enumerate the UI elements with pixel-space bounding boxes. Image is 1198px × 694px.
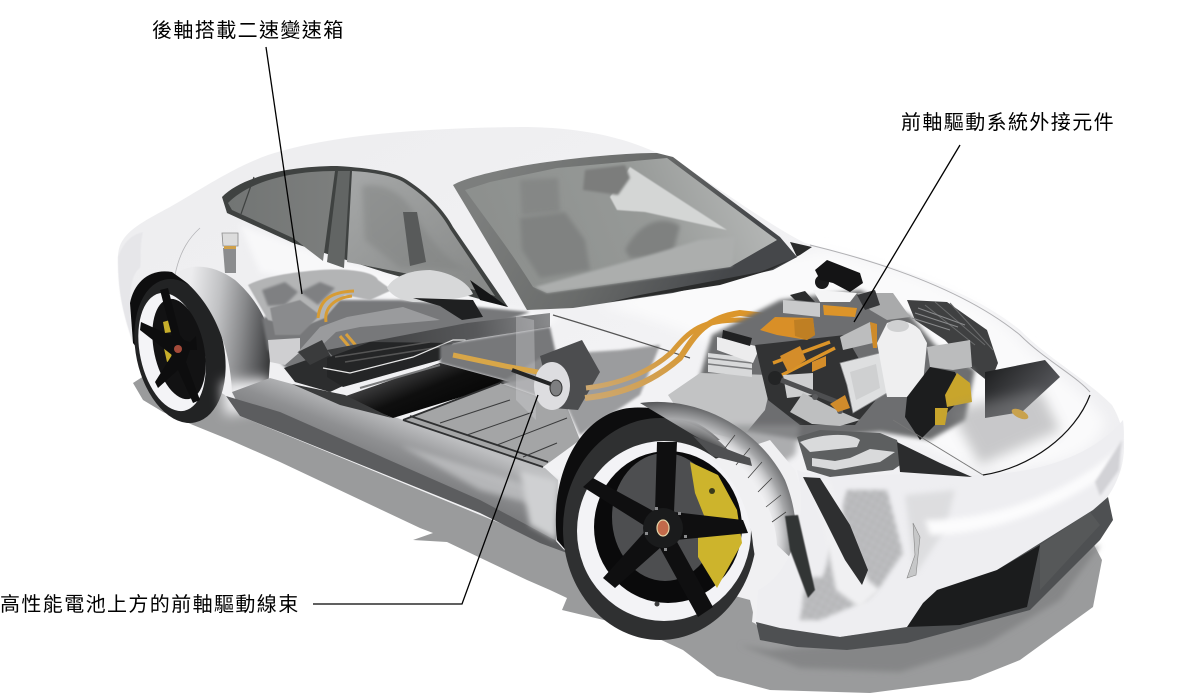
headlight (797, 430, 903, 477)
dark mechanical core (755, 335, 880, 425)
rear quarter glass (228, 171, 335, 261)
side windows (222, 166, 508, 307)
crease line (893, 420, 983, 475)
steering wheel (625, 221, 680, 258)
rear fender panel edge (118, 232, 143, 343)
right silver module (927, 340, 972, 370)
fender bracket (785, 515, 815, 598)
ghost tire band (640, 402, 796, 560)
ghost bracket (907, 523, 920, 578)
mirror housing (387, 270, 473, 302)
pillar ghost (516, 316, 536, 420)
seat belt tower (403, 212, 426, 266)
bumper shell (756, 420, 1124, 637)
rear rim inner (144, 294, 214, 404)
transparent rear tire (176, 267, 271, 403)
rear cables (318, 291, 354, 322)
lower rear cables (340, 334, 358, 350)
motor fin rings (708, 353, 752, 377)
rear tire (122, 270, 238, 432)
bolts (812, 394, 818, 400)
car body (118, 127, 1124, 640)
fender (712, 440, 815, 640)
hood highlight (600, 250, 1105, 470)
right fine pipes (912, 308, 965, 330)
front wheel (556, 407, 757, 640)
module top ribs (335, 342, 440, 362)
door white panel (240, 225, 560, 330)
disc hub (550, 380, 562, 396)
dark box top (790, 291, 815, 302)
ghost fade at bottom (222, 378, 270, 415)
caliper dark screw (709, 488, 715, 494)
black control unit (815, 260, 863, 292)
front rim (577, 441, 751, 621)
tank cap (887, 320, 909, 332)
rear door glass (327, 171, 350, 268)
coolant tank (877, 321, 927, 397)
grille side carbon (1040, 512, 1100, 590)
ghost fade to hood (950, 390, 1060, 465)
battery wiring (323, 340, 520, 373)
rear bracket dark (298, 340, 330, 365)
reservoir (813, 290, 857, 302)
callout: 高性能電池上方的前軸驅動線束 (0, 395, 538, 616)
gearbox shadow (262, 282, 335, 306)
motor base silver (668, 373, 773, 440)
upper silver box (783, 300, 820, 317)
pack dashes (440, 400, 567, 457)
silver module (840, 322, 873, 350)
upper orange bracket (823, 305, 857, 317)
orange cables centre (773, 342, 835, 375)
bumper sheen bands (925, 445, 1122, 535)
motor top block (717, 337, 760, 363)
rear hub (174, 345, 182, 353)
main orange block (760, 317, 815, 340)
windshield glass (465, 158, 777, 293)
label: 高性能電池上方的前軸驅動線束 (0, 593, 300, 616)
driveshaft (512, 370, 556, 386)
side motor and harness (453, 313, 775, 410)
windshield (453, 153, 812, 310)
rear spokes (140, 288, 200, 403)
dashboard (535, 237, 735, 293)
tread lines (925, 302, 993, 350)
small orange elbow (830, 395, 850, 412)
windshield frame (453, 153, 797, 310)
lower silver cylinder (783, 373, 813, 398)
pack plate (403, 383, 580, 467)
yellow front brake (945, 373, 972, 407)
yellow lower (935, 408, 948, 425)
cowl wiper (610, 242, 812, 302)
wheel crest (657, 520, 669, 536)
rear shock tower (223, 248, 236, 273)
hood edge line (810, 245, 1090, 392)
sill light streak (400, 445, 555, 510)
rear fender seam (175, 228, 200, 275)
sill dark band (226, 396, 567, 553)
ghost frame (905, 490, 955, 575)
leader line (854, 145, 960, 322)
tray dark front (292, 384, 392, 418)
tunnel and battery pack (226, 313, 690, 553)
upper frame rail (297, 307, 440, 353)
ghost front tire behind (907, 300, 998, 383)
rearview mirror (583, 165, 630, 195)
dark front bracket (985, 360, 1060, 418)
rear wheel arch (130, 271, 190, 352)
hood shut line (983, 395, 1090, 475)
black A-pillar corner (470, 280, 508, 307)
dark rear tray (284, 355, 345, 392)
dark battery module (327, 342, 453, 387)
shock orange band (224, 246, 236, 249)
front door glass (347, 171, 495, 296)
front tire (563, 418, 757, 640)
harness lower strand (585, 313, 775, 398)
fin stripes (708, 358, 752, 369)
gearbox mottled block (248, 269, 392, 328)
yellow caliper (690, 462, 742, 588)
lower silver bracket (790, 393, 860, 426)
orange side pipe (870, 322, 877, 348)
front spokes (583, 442, 748, 617)
front powertrain (668, 260, 1060, 470)
rear unit dark base (262, 300, 530, 372)
bright rear window patch (610, 167, 727, 230)
carbon radiator (800, 490, 903, 620)
black battery well (343, 363, 510, 418)
front fender and ghost tire (640, 402, 815, 640)
rear pillar split (241, 177, 254, 214)
arch light corner (520, 470, 558, 540)
side motor housing (540, 340, 600, 410)
hub bolts (645, 507, 687, 551)
front air vent (803, 477, 868, 585)
shadow core under front bumper (740, 545, 1100, 672)
window frame (222, 166, 508, 307)
gearbox light parts (270, 300, 320, 335)
callout: 前軸驅動系統外接元件 (854, 111, 1115, 322)
sill silver panel (232, 378, 558, 548)
wheel hub (643, 508, 683, 548)
well rail (360, 365, 440, 388)
lower mechanical haze (730, 425, 800, 470)
orange junction blobs (780, 346, 826, 372)
splitter (756, 497, 1113, 650)
interior in door glass (362, 185, 470, 270)
dark wedge (897, 442, 972, 477)
upper dark link (857, 290, 880, 310)
black motor cap (722, 330, 752, 346)
pack border (403, 383, 548, 467)
dark pipe (781, 380, 845, 405)
body shell (118, 127, 1124, 640)
rear shock top (222, 233, 238, 246)
porsche hood crest (1010, 407, 1030, 421)
front bumper (756, 245, 1124, 650)
white swoop (805, 480, 880, 608)
seat headrest (520, 178, 560, 215)
reservoir cap (815, 275, 829, 289)
pipe ring (768, 371, 782, 385)
front seat (520, 212, 590, 278)
rear drive unit (248, 269, 530, 392)
right floor fade (500, 345, 660, 435)
label: 前軸驅動系統外接元件 (901, 111, 1115, 134)
callout: 後軸搭載二速變速箱 (152, 19, 345, 294)
brake disc ghost (534, 362, 570, 410)
tunnel (327, 313, 550, 372)
rim valve (654, 602, 660, 606)
black lower steering (905, 367, 965, 440)
ghost hatch (722, 435, 786, 522)
oil pan (840, 353, 887, 413)
powertrain solid base (690, 290, 975, 440)
leader line (313, 395, 538, 604)
rear rim (128, 287, 216, 417)
label: 後軸搭載二速變速箱 (152, 19, 345, 42)
upper right silver (857, 293, 910, 320)
rear caliper (163, 320, 172, 362)
rear wheel (122, 233, 271, 432)
pan recess (850, 364, 880, 400)
harness rear section (453, 355, 548, 374)
leader line (266, 47, 302, 294)
lower grille (907, 545, 1040, 627)
clip line (553, 315, 690, 358)
mirror arm (413, 298, 483, 320)
wheel arch (556, 407, 720, 553)
rim well (594, 451, 742, 603)
arch dark bar (693, 436, 752, 466)
ground shadow (133, 340, 1102, 693)
harness upper strand (586, 320, 772, 388)
bumper shade edge (1095, 440, 1122, 496)
suspension light block (268, 338, 300, 365)
headlight silver parts (800, 435, 895, 470)
mid floor grey (440, 327, 560, 382)
orange block shading (794, 318, 815, 340)
brake disc (612, 453, 718, 581)
